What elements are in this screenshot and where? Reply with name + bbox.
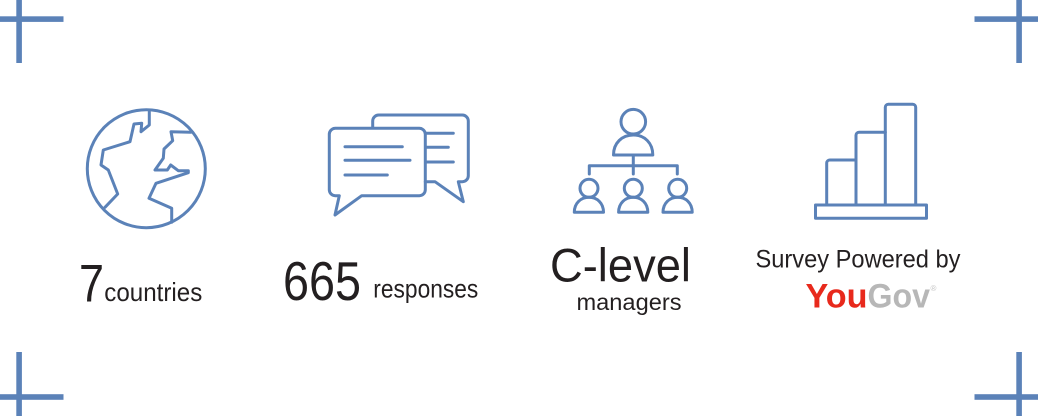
stat: 665 responses: 665 — [283, 250, 361, 312]
label: survey powered by YouGov: Survey Powered by — [756, 245, 961, 273]
corner mark: bottom left — [0, 352, 64, 416]
logo: YouGov: You — [806, 277, 868, 315]
icon: organisation chart — [574, 109, 692, 212]
stat: 665 responses: responses — [373, 274, 478, 304]
label: C-level managers: managers — [576, 289, 682, 315]
logo: YouGov — [806, 277, 936, 315]
stat: 7 countries: countries — [104, 277, 202, 307]
logo: YouGov: ® — [930, 284, 936, 293]
icon: globe — [87, 110, 205, 228]
label: C-level managers — [550, 239, 691, 315]
stat: 7 countries: 7 — [79, 255, 104, 314]
corner mark: top left — [0, 0, 64, 63]
icon: speech bubbles — [329, 115, 468, 215]
icon: bar chart — [816, 104, 926, 218]
corner mark: bottom right — [974, 352, 1038, 416]
stat: 7 countries — [79, 255, 202, 314]
label: C-level managers: C-level — [550, 239, 691, 292]
stat: 665 responses — [283, 250, 478, 312]
corner mark: top right — [974, 0, 1038, 63]
logo: YouGov: Gov — [868, 277, 930, 315]
label: survey powered by YouGov — [756, 245, 961, 315]
